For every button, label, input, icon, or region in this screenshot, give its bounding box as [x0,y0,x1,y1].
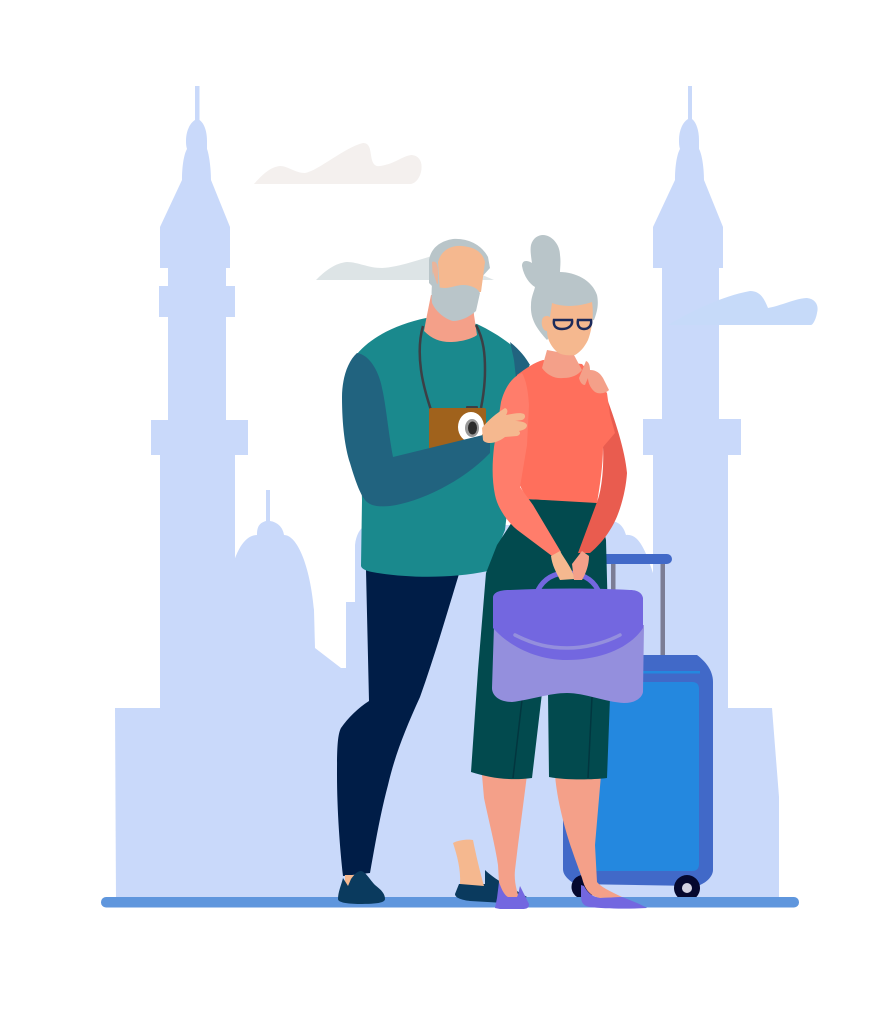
skyline base wall [115,708,779,900]
trouser pleats [513,697,592,778]
left handle rod [611,560,616,660]
suitcase [563,554,713,897]
camera lens [458,412,484,442]
woman right sleeve [578,393,627,553]
cloud: middle grey [316,255,494,280]
woman sweater [517,360,615,503]
small dome with spire [230,490,654,720]
right lens [578,320,591,329]
suitcase zip line [640,671,700,674]
flap highlight [515,635,620,648]
left minaret [151,86,248,720]
lens ring [465,419,479,437]
background silhouette: mosque skyline [115,86,779,900]
right handle rod [660,560,665,660]
man neck [424,295,477,342]
woman hands on handle [551,551,589,580]
woman neck [542,350,582,378]
ground line [101,897,799,908]
man hand on shoulder [579,361,609,393]
camera body [429,408,486,450]
lens centre [468,422,477,434]
woman right shoe [581,885,647,909]
right minaret [643,86,741,720]
man far sleeve [510,342,530,378]
woman hair with bun [522,235,598,340]
man ear [432,262,438,284]
camera top buttons [466,406,478,410]
cloud: top beige [254,143,422,184]
white gap under elbow [598,474,606,503]
briefcase handle [538,573,598,590]
briefcase body [492,625,644,703]
handle grip [600,554,672,564]
front hand [551,551,575,580]
left lens [554,320,572,329]
man legs [337,570,459,876]
suitcase front panel [578,682,699,871]
back hand [572,551,589,580]
woman [471,235,647,909]
man beard [432,272,480,321]
woman left shoe [495,882,529,909]
briefcase flap [493,588,643,660]
man face [438,246,485,292]
man arm [342,353,490,506]
woman left leg [482,775,527,900]
man sweater torso [357,318,530,577]
man ankle [453,840,484,886]
woman glasses [554,320,591,329]
woman left sleeve [493,373,561,556]
woman trousers [471,499,610,779]
man hand on arm [482,408,527,443]
man upper body [357,239,530,577]
woman face [542,302,593,355]
wheel tyre [674,875,700,897]
man shoe right [455,870,527,903]
camera strap [420,325,485,410]
left wheel [572,875,596,897]
woman right leg [555,775,622,898]
suitcase telescopic handle [600,554,672,660]
wheel hub [682,883,692,893]
briefcase [492,551,644,703]
suitcase shell [563,655,713,886]
right wheel [674,875,700,897]
cloud: right blue [668,291,818,325]
man shoe left [338,871,385,904]
camera [429,406,486,450]
man ankle skin left [345,875,354,886]
man arm and hands [342,353,609,506]
man hair [429,239,490,290]
